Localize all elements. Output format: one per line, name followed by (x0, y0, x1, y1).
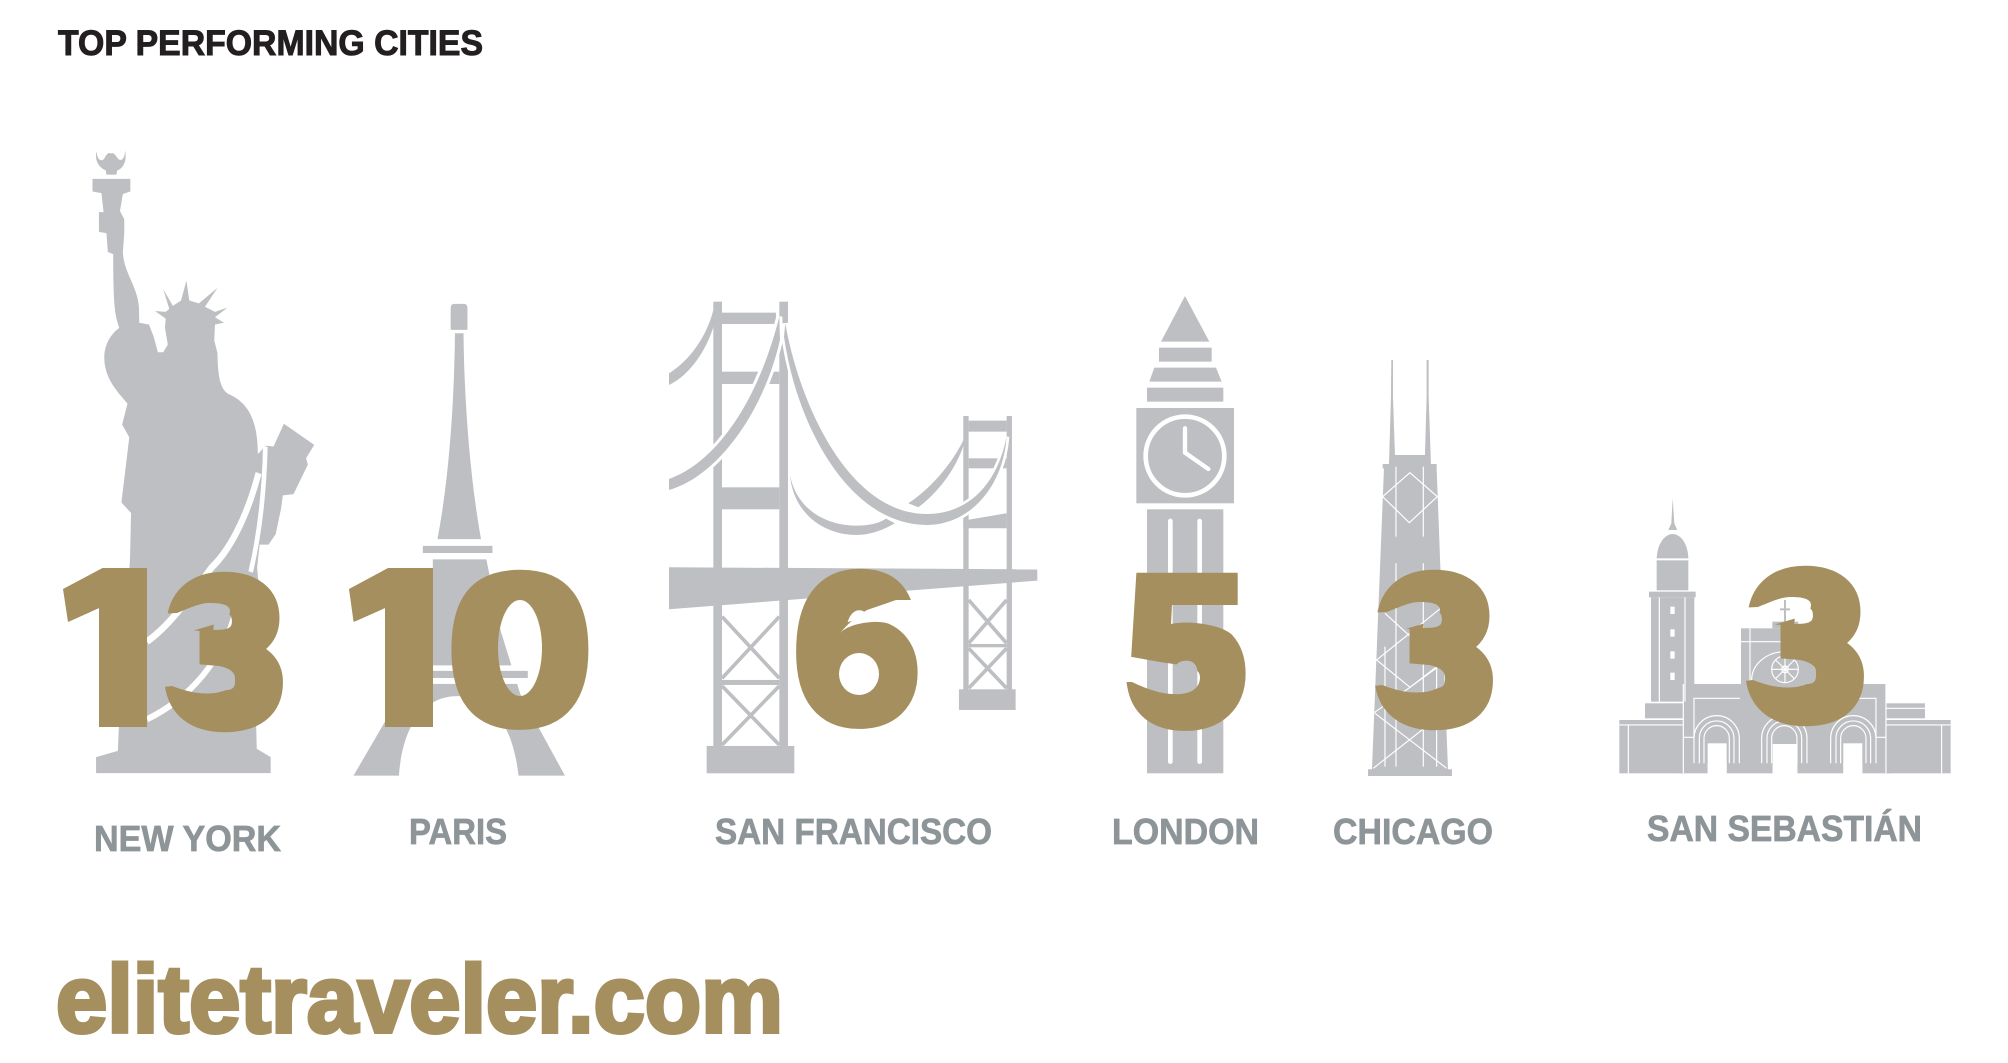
number: 13: 1 (55, 541, 178, 762)
number: 10: 0 (454, 540, 586, 761)
number: 6: 6 (799, 539, 915, 760)
label: san francisco: SAN FRANCISCO (715, 811, 992, 852)
number: 13: 3 (170, 541, 280, 762)
icon: eiffel tower (354, 304, 565, 776)
number: 3 san sebastian: 3 (1751, 535, 1861, 756)
number: 5: 5 (1131, 540, 1241, 761)
icon: statue of liberty (92, 150, 314, 773)
label: new york: NEW YORK (94, 818, 281, 859)
icon: golden gate bridge (669, 302, 1037, 773)
website footer: elitetraveler.com (56, 946, 783, 1053)
icon: john hancock center, chicago (1368, 360, 1452, 776)
number: 3 chicago: 3 (1380, 539, 1490, 760)
label: london: LONDON (1112, 811, 1259, 852)
title: TOP PERFORMING CITIES (58, 24, 483, 63)
label: san sebastian: SAN SEBASTIÁN (1647, 808, 1922, 849)
number: 13 (63, 568, 283, 732)
icon: big ben (1136, 296, 1234, 773)
label: paris: PARIS (409, 811, 507, 852)
label: chicago: CHICAGO (1333, 811, 1493, 852)
number: 10: 1 (341, 541, 464, 762)
number: 10 (349, 568, 588, 730)
icon: san sebastian cathedral (1619, 498, 1951, 773)
